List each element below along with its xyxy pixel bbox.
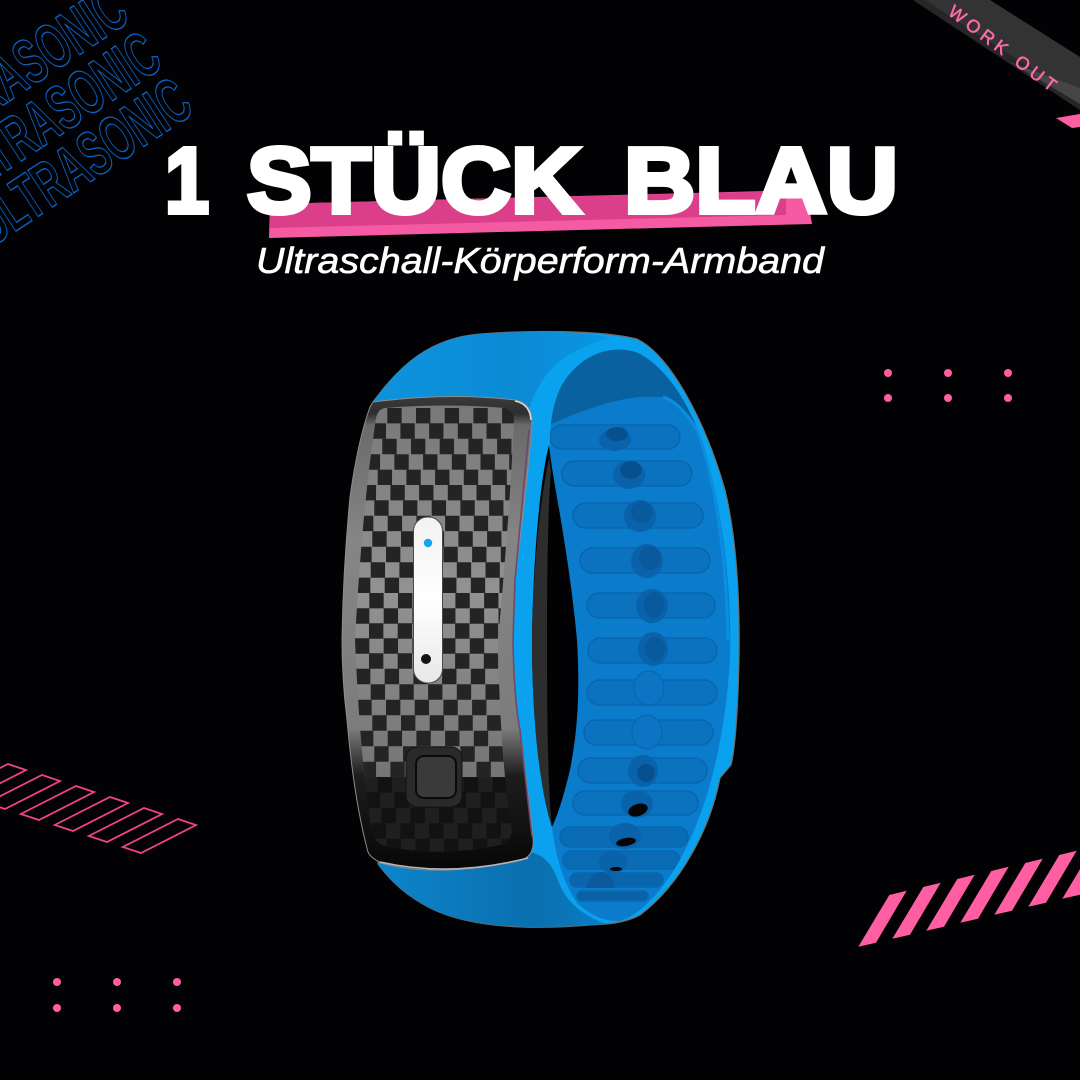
ribbon: work out: WORK OUT [945,1,1060,95]
band: upper outer face [373,332,612,407]
dim lower panel [364,777,512,852]
chrome corner [515,401,531,420]
blue led [424,539,432,547]
black sensor dot [421,654,431,664]
ribbon: work out [913,0,1080,128]
bottom lip highlight [380,858,528,869]
device body [326,396,533,870]
carbon checker panel [355,406,514,852]
title: STÜCK [247,128,581,232]
wristband product [326,331,740,927]
band: clasp strip in the gap [532,458,552,827]
outlined stripes bottom left [0,764,196,853]
subtitle: Ultraschall-Körperform-Armband [256,240,825,281]
solid stripes bottom right [858,843,1080,947]
dots bottom left [53,978,181,1012]
lower holes with see-through [585,755,658,888]
title: BLAU [624,128,898,232]
square button [406,747,462,807]
band: opening gap [532,445,578,827]
dots top right [884,369,1012,402]
band: inner surface with ribs and holes [550,350,730,922]
title [165,128,898,232]
pink highlight bar behind title [269,190,812,238]
band: lower outer face [378,852,607,927]
band: silhouette with bright rim [373,331,739,927]
decorative outlined ULTRASONIC text [0,0,204,259]
white status pill [414,517,442,683]
title: 1 [165,128,209,232]
holes [599,427,668,666]
pegs [632,671,664,749]
purple edge [513,430,532,836]
